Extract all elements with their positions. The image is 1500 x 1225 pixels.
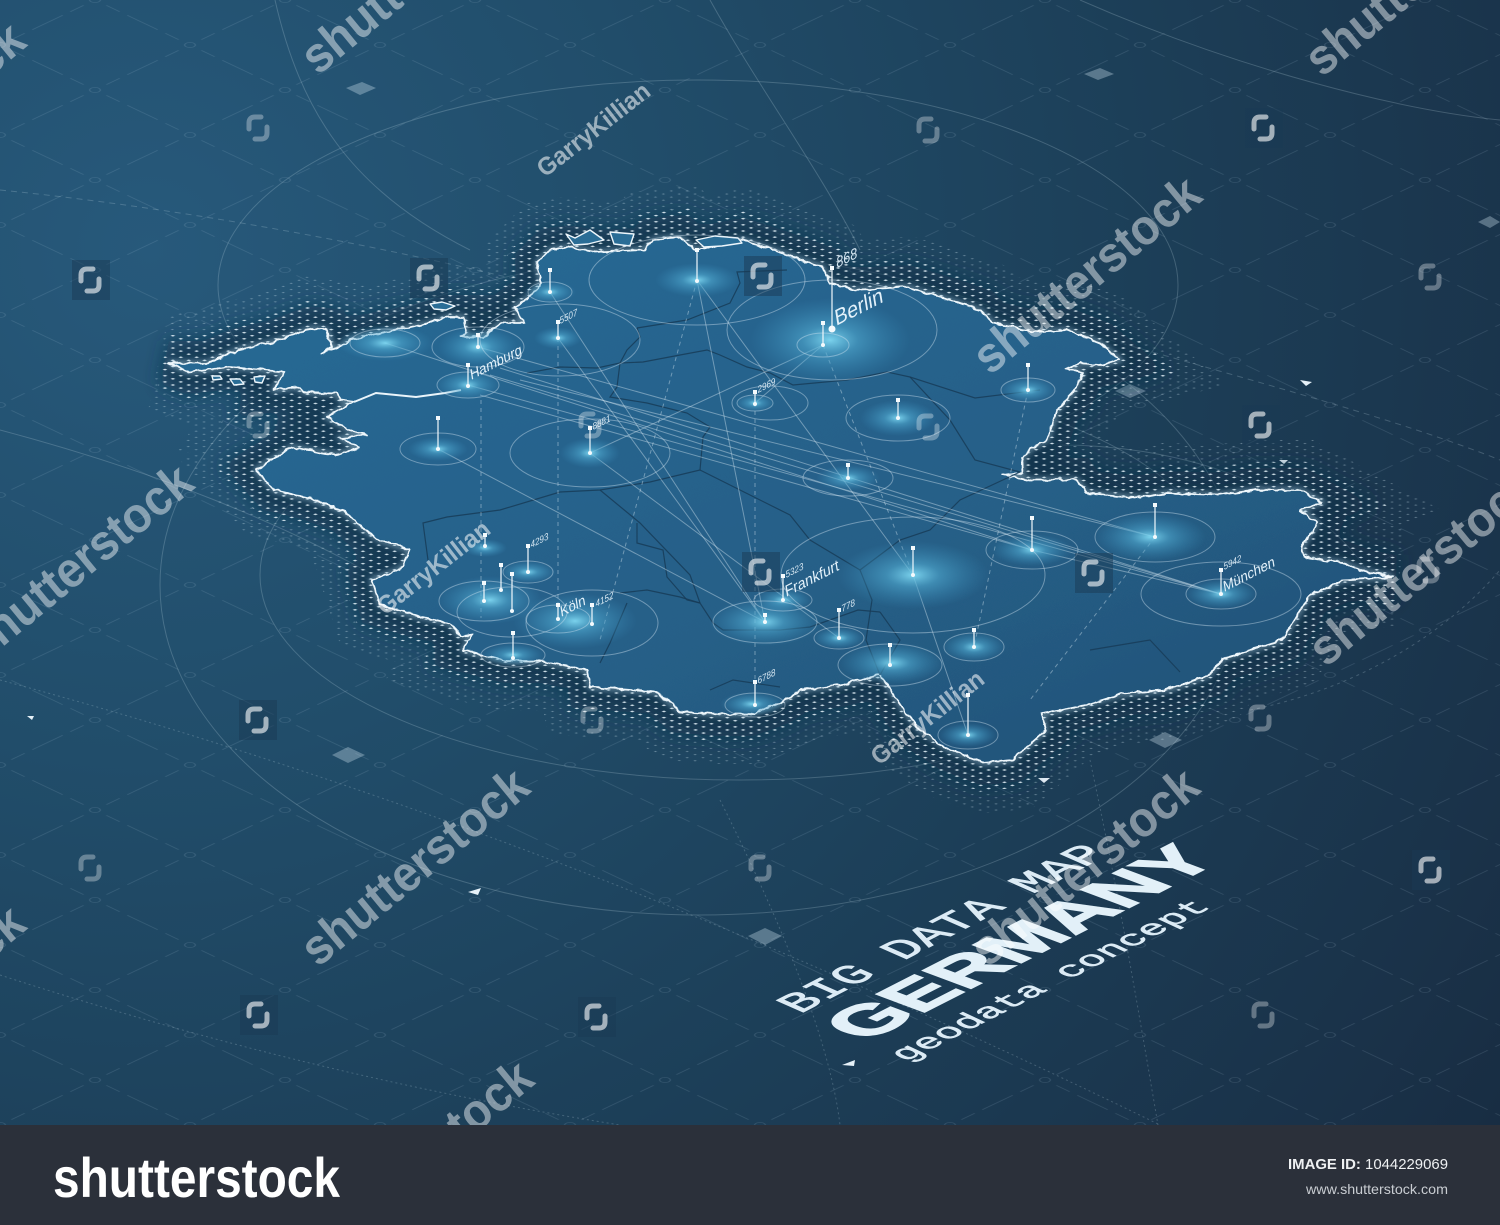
land mass: [169, 237, 1393, 763]
subtitle: geodata concept: geodata concept: [881, 895, 1221, 1066]
footer logo: shutterstock: [53, 1146, 341, 1209]
label: Köln: Köln: [559, 592, 587, 621]
city rings: [350, 235, 1301, 749]
label: Berlin value: 868: [835, 245, 858, 272]
watermarks: shutterstock: [289, 756, 540, 976]
watermarks: GarryKillian: [531, 77, 656, 183]
coastal islands: [212, 230, 742, 385]
city labels: [469, 245, 1276, 686]
label: numeric values: 778: [841, 597, 856, 614]
state borders: [423, 270, 1180, 690]
footer url: www.shutterstock.com: [1305, 1181, 1448, 1197]
label: numeric values: 5323: [785, 560, 805, 580]
map of Germany: [169, 230, 1393, 763]
watermarks: GarryKillian: [371, 515, 496, 621]
footer bar: [0, 1125, 1500, 1225]
label: Frankfurt: Frankfurt: [784, 556, 841, 601]
connection lines: [385, 280, 1221, 735]
label: Hamburg: Hamburg: [469, 342, 523, 384]
Elbe estuary line: [354, 390, 461, 402]
label: numeric values: 2969: [756, 376, 776, 395]
watermark logo squares: [72, 108, 1450, 1037]
label: numeric values: 6788: [757, 666, 777, 686]
label: numeric values: [530, 306, 1242, 686]
background diamond markers: [332, 68, 1500, 945]
label: numeric values: 4152: [595, 590, 614, 609]
label: München: München: [1222, 554, 1276, 596]
footer image id: IMAGE ID: 1044229069: [1288, 1156, 1448, 1173]
title: BIG DATA MAP: BIG DATA MAP: [766, 839, 1122, 1019]
title: GERMANY: GERMANY: [804, 837, 1237, 1048]
label: Berlin: Berlin: [833, 282, 885, 331]
background triangle markers: [27, 380, 1312, 1066]
watermarks: GarryKillian: [865, 665, 990, 771]
coast glow: [169, 237, 1393, 763]
title block: [766, 837, 1237, 1066]
coastal dot halo: [169, 237, 1393, 763]
label: numeric values: 4293: [530, 530, 550, 550]
watermarks: shutterstock: [959, 756, 1210, 976]
label: numeric values: 8881: [592, 413, 611, 432]
watermarks: shutterstock: [961, 164, 1212, 384]
label: numeric values: 5507: [559, 306, 579, 326]
city glows: [337, 263, 1257, 747]
city pins: [436, 248, 1223, 737]
label: numeric values: 5942: [1223, 553, 1242, 572]
